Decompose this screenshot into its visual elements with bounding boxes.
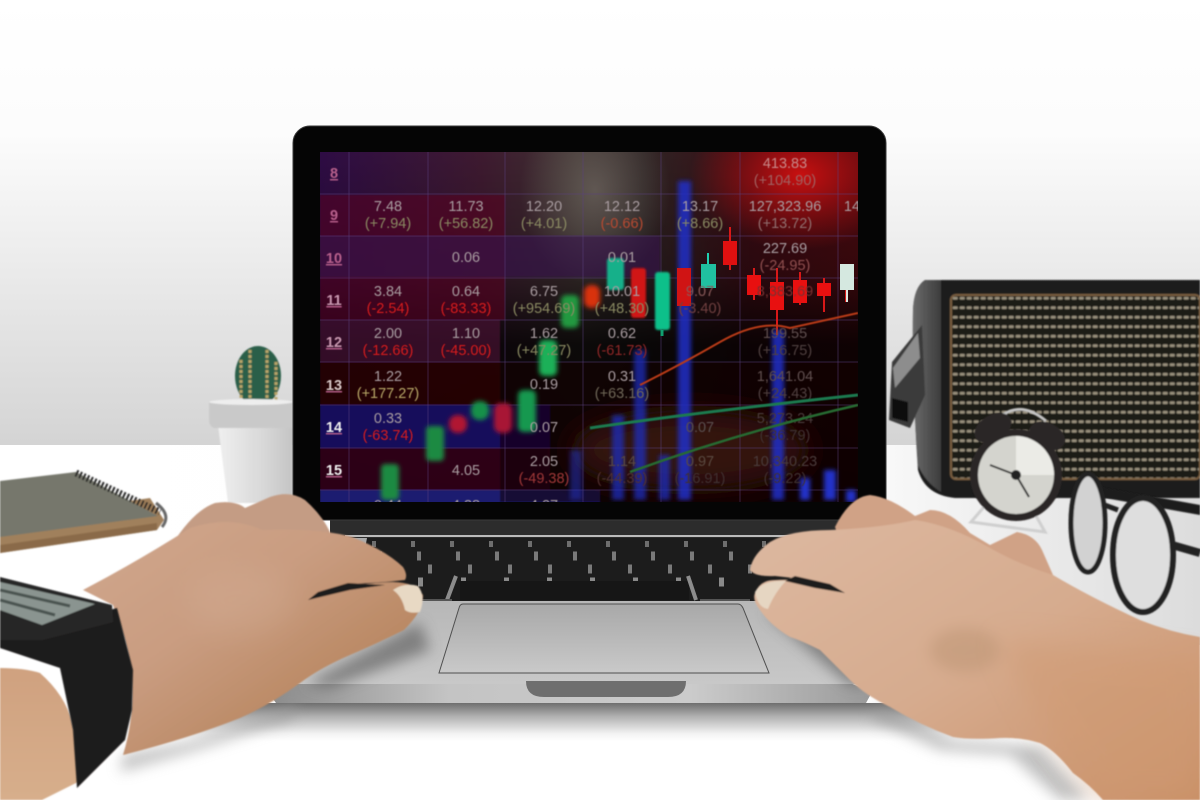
table values: 13.17 (682, 199, 718, 215)
table values: 10,340.23 (753, 454, 817, 470)
table values: 10.01 (604, 284, 640, 300)
keyboard (355, 538, 805, 601)
right back fingers (835, 495, 1053, 600)
table values: 14 (844, 199, 860, 215)
table values: (+8.66) (677, 216, 723, 232)
table values: 0.01 (608, 250, 636, 266)
table values: (+16.75) (758, 343, 812, 359)
table values: 1.22 (374, 369, 402, 385)
left back fingers (175, 494, 330, 570)
table values: 0.44 (374, 498, 402, 514)
watch band (0, 608, 133, 788)
wrist tone (1000, 640, 1200, 800)
table values: (+13.72) (758, 216, 812, 232)
table values: 0.33 (374, 411, 402, 427)
left hand (0, 494, 423, 800)
table values: (+63.16) (595, 386, 649, 402)
table values: 227.69 (763, 241, 807, 257)
right hand (750, 495, 1200, 800)
left red/blue table bands (320, 195, 858, 504)
table values: 0.07 (530, 420, 558, 436)
table values: 413.83 (763, 156, 807, 172)
speaker body (913, 280, 1200, 498)
left thumbnail (393, 585, 423, 613)
table values: 1.14 (608, 454, 636, 470)
table values: 3.84 (374, 284, 402, 300)
table values: 9.07 (686, 284, 714, 300)
row numbers (326, 166, 342, 479)
hand tendon shade (930, 628, 1000, 672)
table values: 11.73 (448, 199, 484, 215)
table values: (+47.27) (517, 343, 571, 359)
table values: (-16.91) (675, 471, 725, 487)
table values: (+104.90) (754, 173, 816, 189)
table values: 0.19 (530, 377, 558, 393)
table values: 0.06 (452, 250, 480, 266)
table values: (-83.33) (441, 301, 491, 317)
table values: 2.00 (374, 326, 402, 342)
table values: 12.20 (526, 199, 562, 215)
speaker (889, 280, 1200, 498)
hand shadows on table (120, 700, 1090, 800)
trend lines (590, 313, 858, 472)
gap between left finger and thumb (308, 583, 385, 600)
hinge (330, 516, 850, 538)
table values: 0.97 (686, 454, 714, 470)
table values: (+56.82) (439, 216, 493, 232)
table values: (-61.73) (597, 343, 647, 359)
laptop (196, 126, 944, 736)
notebook (0, 472, 166, 553)
table values: (-44.39) (597, 471, 647, 487)
table values: (+177.27) (357, 386, 419, 402)
table values (357, 156, 860, 514)
row numbers: 13 (326, 378, 342, 394)
table shadow under laptop (150, 703, 1010, 741)
white table surface (0, 445, 1200, 800)
eyeglasses (1071, 474, 1200, 612)
table values: 12.12 (604, 199, 640, 215)
table values: 1.62 (530, 326, 558, 342)
right thumbnail (755, 581, 786, 609)
table values: (-24.95) (760, 258, 810, 274)
row numbers: 9 (330, 208, 338, 224)
table values: 0.07 (686, 420, 714, 436)
cactus (235, 346, 281, 406)
table values: 199.55 (763, 326, 807, 342)
table values: 0.64 (452, 284, 480, 300)
table values: 4.05 (452, 463, 480, 479)
row numbers: 12 (326, 335, 342, 351)
smartwatch (0, 577, 133, 788)
table values: (-2.54) (367, 301, 409, 317)
left hand and fingers (83, 522, 423, 755)
table values: (+24.43) (758, 386, 812, 402)
left knuckle highlight (185, 565, 295, 635)
pot (209, 399, 293, 503)
sharp candlesticks (607, 227, 854, 336)
table values: (+4.01) (521, 216, 567, 232)
row numbers: 14 (326, 420, 342, 436)
table values: 1.10 (452, 326, 480, 342)
thumb notch (526, 681, 686, 697)
table values: 7.48 (374, 199, 402, 215)
laptop front lip (268, 683, 872, 703)
right hand and arm (750, 520, 1200, 800)
clock face (978, 436, 1054, 514)
table values: 2.05 (530, 454, 558, 470)
table values: (+7.94) (365, 216, 411, 232)
alarm clock (969, 407, 1070, 532)
table values: 1,641.04 (757, 369, 813, 385)
table values: (-3.40) (679, 301, 721, 317)
gap between right finger and thumb (785, 576, 845, 593)
table values: 0.31 (608, 369, 636, 385)
table values: 0.62 (608, 326, 636, 342)
row numbers: 15 (326, 463, 342, 479)
blue volume bars (570, 181, 856, 502)
table values: 4.38 (452, 498, 480, 514)
table values: (-36.79) (760, 428, 810, 444)
table values: 8,383.69 (757, 284, 813, 300)
row numbers: 8 (330, 166, 338, 182)
row numbers: 10 (326, 251, 342, 267)
table values: 127,323.96 (749, 199, 821, 215)
left forearm (0, 668, 79, 800)
blurred candlesticks (381, 285, 600, 500)
speaker grille (951, 295, 1200, 479)
row numbers: 11 (326, 293, 342, 309)
keyboard deck (292, 534, 860, 684)
table values: (-12.66) (363, 343, 413, 359)
screen (320, 152, 858, 502)
watch body (0, 577, 113, 640)
table grid (320, 152, 858, 502)
table values: (-0.66) (601, 216, 643, 232)
speaker handle (889, 325, 925, 428)
hand shadows on trackpad (305, 612, 880, 688)
table values: 4.27 (530, 498, 558, 514)
trackpad (439, 604, 769, 673)
table values: (-49.38) (519, 471, 569, 487)
potted cactus (209, 346, 293, 503)
table values: (-63.74) (363, 428, 413, 444)
laptop lid (293, 126, 886, 520)
table values: (+954.69) (513, 301, 575, 317)
table values: 5,273.24 (757, 411, 813, 427)
wall background (0, 0, 1200, 445)
table values: (-45.00) (441, 343, 491, 359)
table values: (+48.30) (595, 301, 649, 317)
table values: (-9.22) (764, 471, 806, 487)
table values: 6.75 (530, 284, 558, 300)
